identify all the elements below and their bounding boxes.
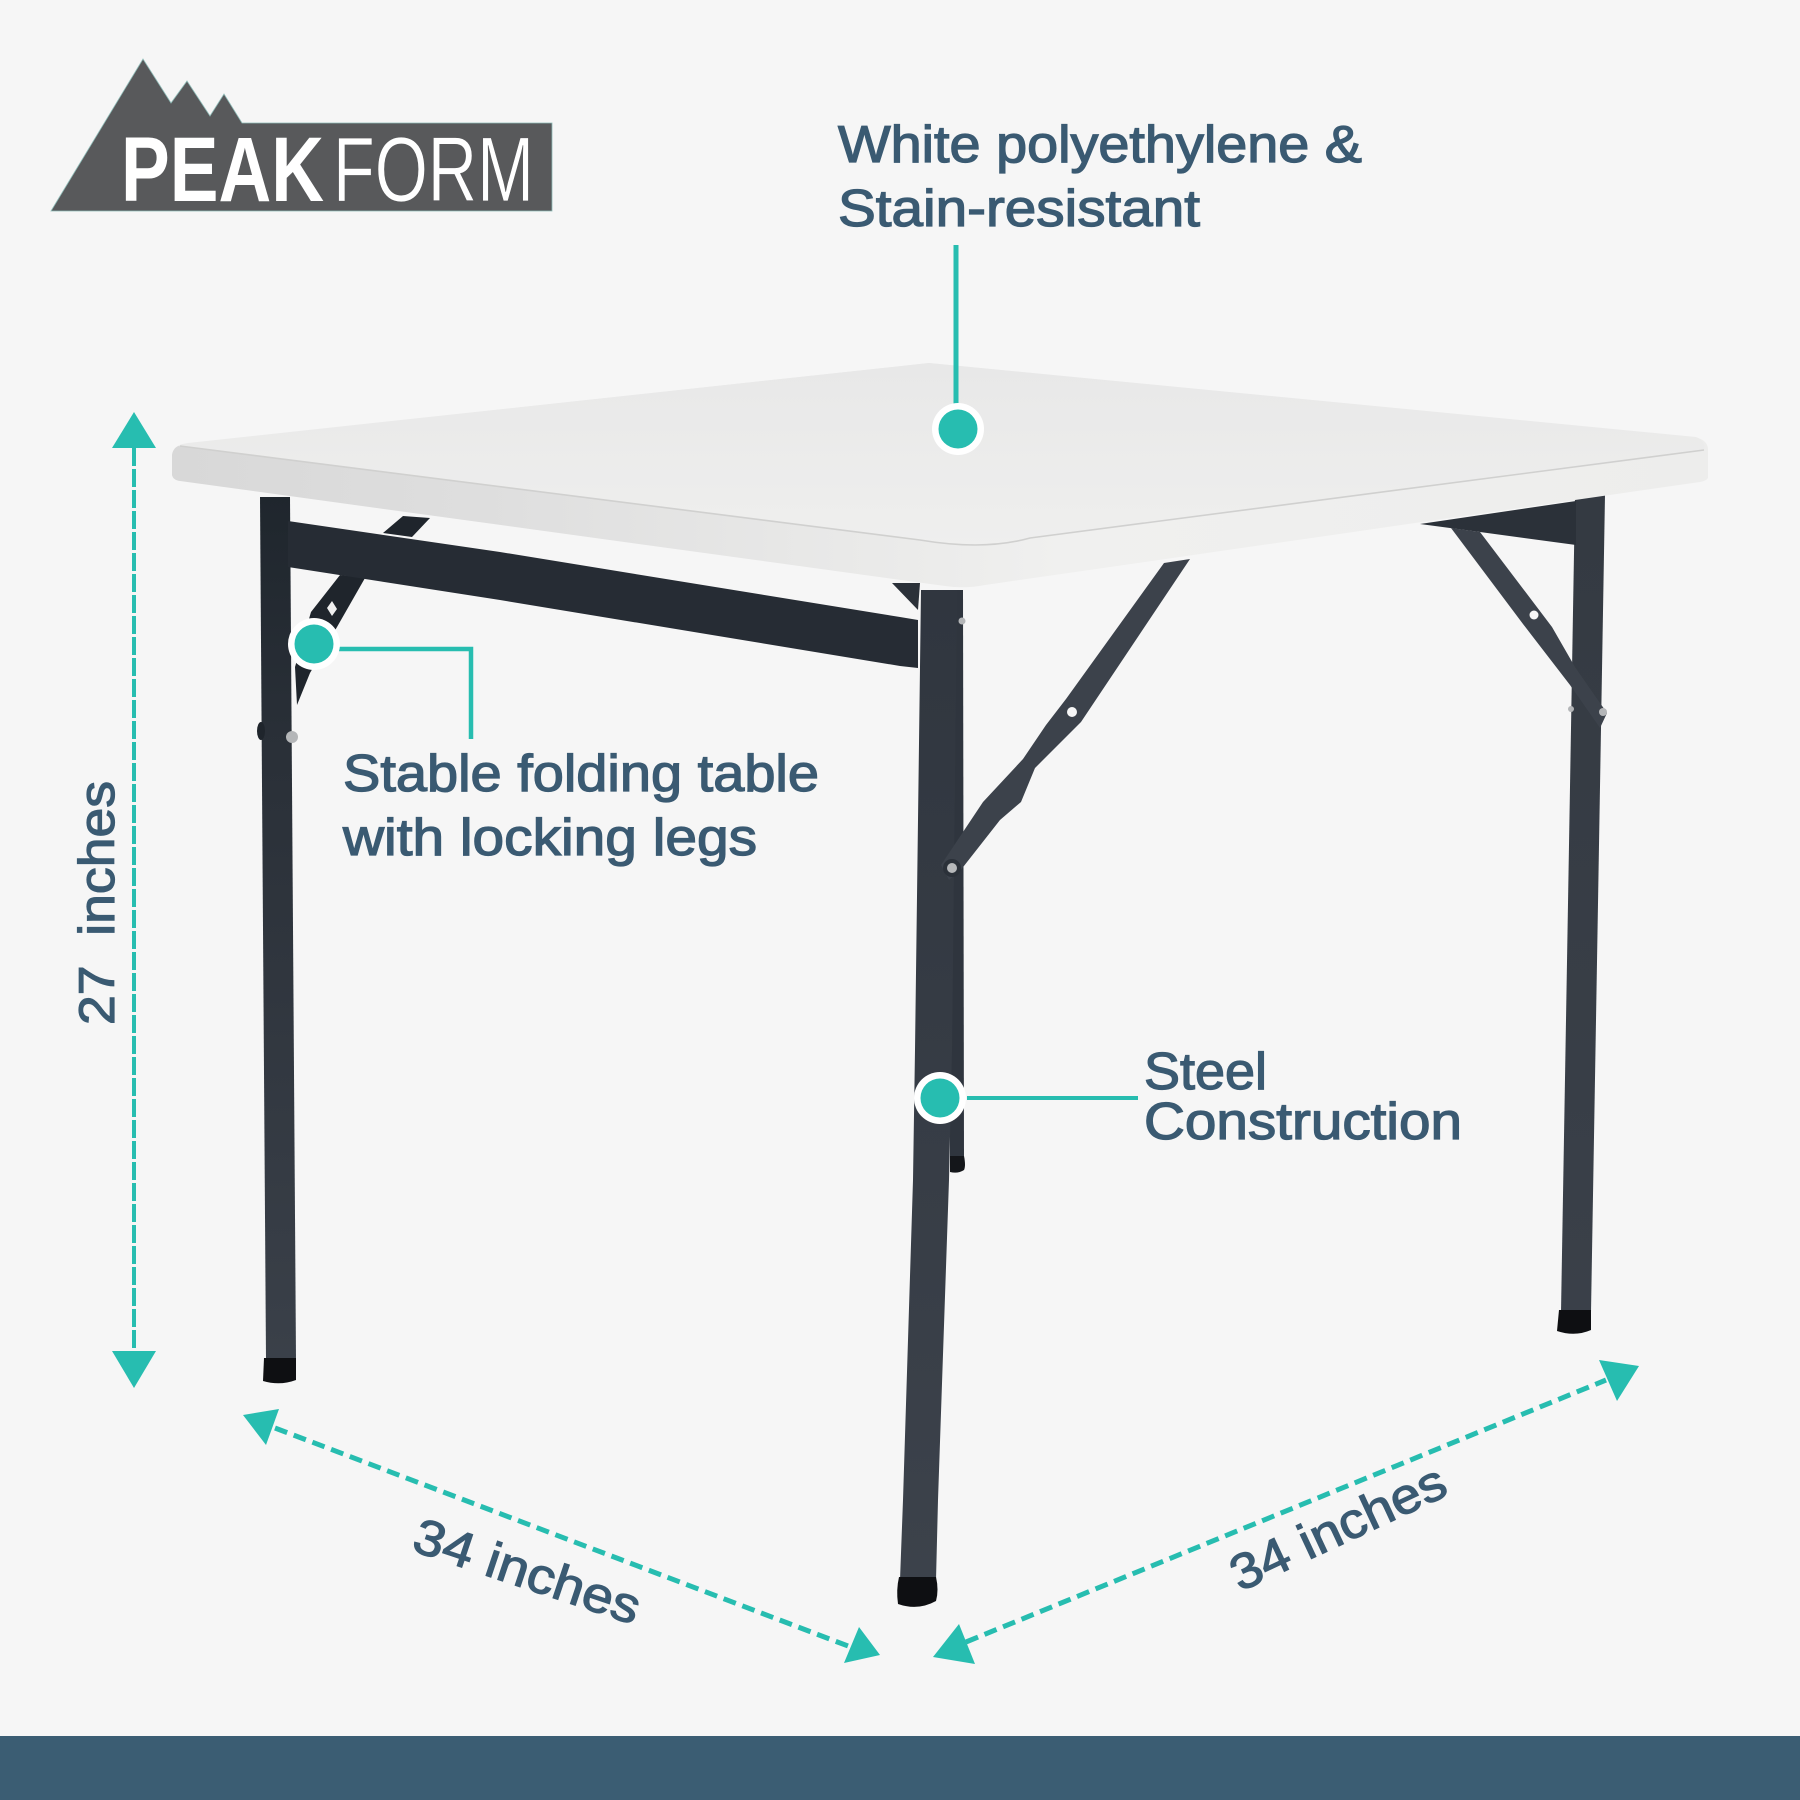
middle folding brace <box>941 559 1190 880</box>
height label: 27 inches <box>69 781 125 1025</box>
table top surface <box>178 363 1704 545</box>
callout marker dot <box>932 403 984 455</box>
middle gusset <box>892 583 920 610</box>
callout text: white polyethylene: White polyethylene & <box>838 116 1362 174</box>
table edge crease <box>180 446 1704 545</box>
callout text: stable folding: with locking legs <box>342 809 757 867</box>
callout text: steel: Construction <box>1144 1093 1462 1151</box>
left hinge bolt <box>257 722 298 743</box>
right leg <box>1557 495 1605 1334</box>
callout leader line <box>338 649 471 739</box>
callout text: stable folding: Stable folding table <box>343 745 819 803</box>
callout text: steel: Steel <box>1144 1043 1267 1101</box>
callout text: white polyethylene: Stain-resistant <box>838 180 1201 238</box>
logo word PEAK: PEAK <box>121 119 324 221</box>
height dimension arrow <box>112 412 156 1388</box>
callout text: white polyethylene <box>838 116 1362 238</box>
footer band <box>0 1736 1800 1800</box>
left crossbar <box>288 521 918 668</box>
callout marker dot <box>914 1072 966 1124</box>
depth label: 34 inches <box>1221 1453 1455 1602</box>
back middle leg <box>950 590 965 1173</box>
right crossbar <box>1420 501 1576 545</box>
callout text: stable folding <box>342 745 819 867</box>
right folding brace <box>1451 528 1607 728</box>
logo word FORM: FORM <box>333 119 534 221</box>
width dimension arrow <box>243 1409 880 1663</box>
left leg <box>260 497 296 1383</box>
depth dimension arrow <box>933 1360 1639 1664</box>
callout text: steel <box>1144 1043 1462 1151</box>
callout marker dot <box>288 618 340 670</box>
callout: steel construction <box>914 1043 1462 1151</box>
callout leader line <box>954 245 958 410</box>
table edge <box>172 363 1708 587</box>
logo mountain badge <box>51 59 552 211</box>
callout: top material <box>838 116 1362 455</box>
folding table <box>172 363 1708 1607</box>
middle leg <box>897 590 966 1607</box>
width label: 34 inches <box>407 1507 648 1635</box>
callout: locking legs <box>288 618 819 867</box>
callout leader line <box>967 1096 1138 1100</box>
logo: PeakForm <box>51 59 552 221</box>
left folding brace <box>295 516 430 705</box>
